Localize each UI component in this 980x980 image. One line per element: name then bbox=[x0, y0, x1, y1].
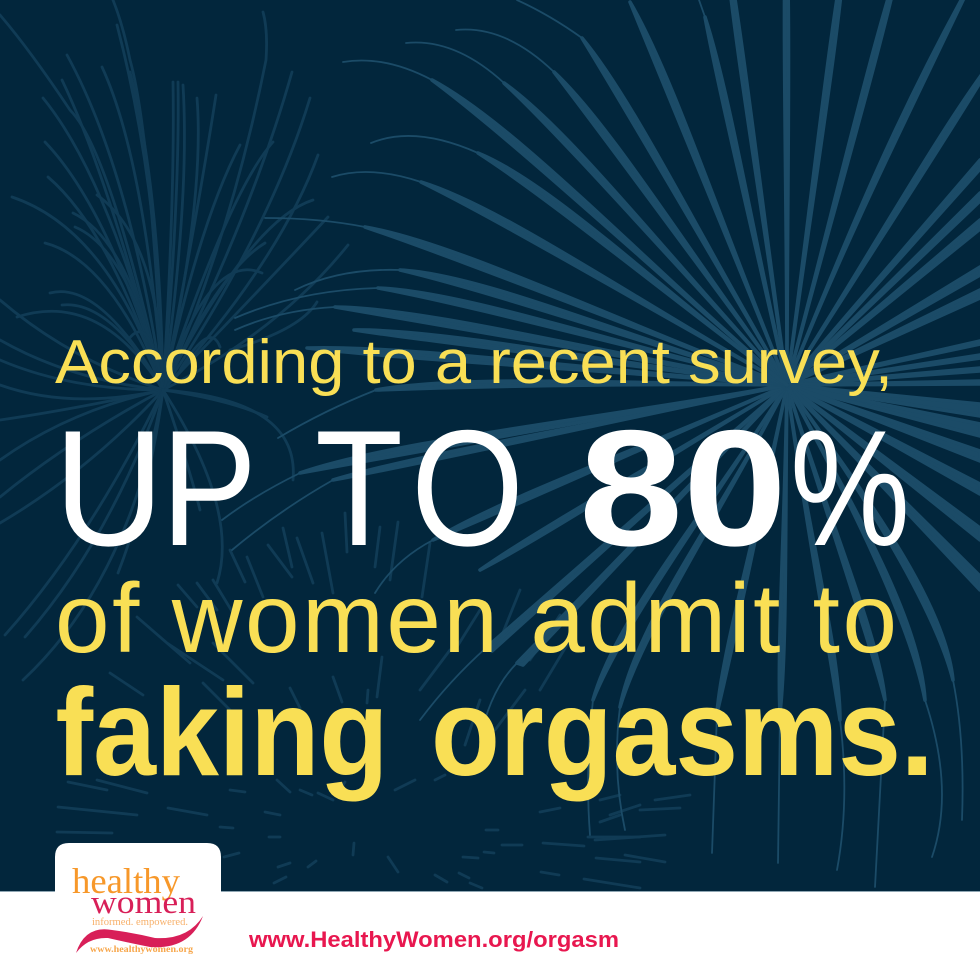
text: According to a recent survey: According to a recent survey, bbox=[55, 328, 893, 397]
headline: UP TO 80%: T bbox=[315, 396, 403, 580]
logo: HealthyWomen: women bbox=[91, 885, 196, 921]
headline: UP TO 80%: 80 bbox=[579, 396, 787, 580]
footer band bbox=[0, 891, 980, 980]
logo: HealthyWomen: healthy bbox=[72, 861, 180, 901]
logo: HealthyWomen: www.healthywomen.org bbox=[90, 945, 193, 955]
headline: UP TO 80%: % bbox=[790, 396, 910, 580]
logo: HealthyWomen: informed. empowered. bbox=[92, 917, 188, 928]
headline: UP TO 80% bbox=[54, 396, 910, 580]
website link: www.HealthyWomen.org/orgasm bbox=[248, 927, 619, 952]
headline: UP TO 80%: P bbox=[161, 396, 257, 580]
text: faking orgasms: orgasms bbox=[431, 664, 901, 802]
fireworks: large right burst bbox=[300, 0, 980, 720]
fireworks: thin ray tails bbox=[222, 0, 963, 887]
headline: UP TO 80%: U bbox=[54, 396, 164, 580]
headline: UP TO 80%: O bbox=[411, 396, 524, 580]
text: of women admit to: of women admit to bbox=[55, 563, 897, 673]
fireworks: lower centre burst of short dashes bbox=[57, 513, 690, 888]
fireworks: small left burst bbox=[0, 0, 348, 680]
text: faking orgasms: faking bbox=[56, 664, 388, 802]
logo: HealthyWomen bbox=[55, 843, 221, 955]
text: faking orgasms: . bbox=[900, 664, 934, 802]
